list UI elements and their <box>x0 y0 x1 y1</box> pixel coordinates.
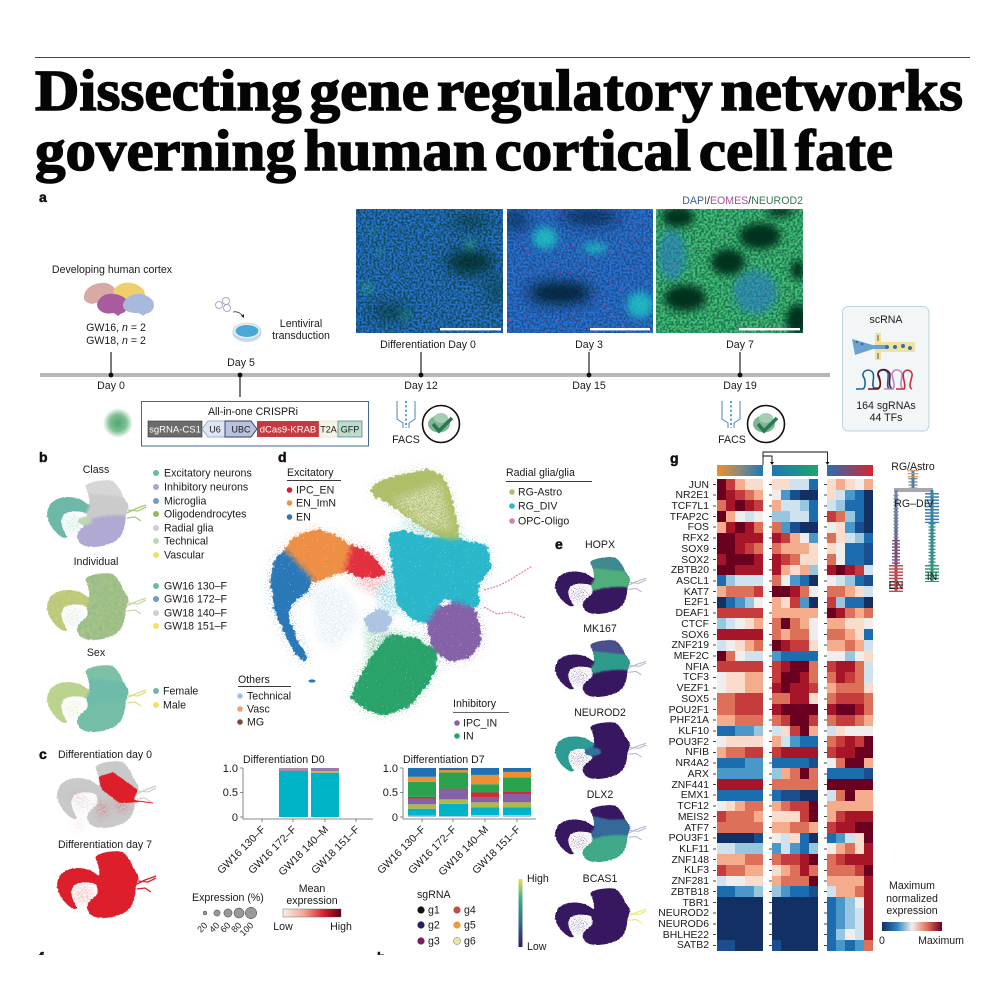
chart: differentiation D7 stacked bars: GW16 172–F <box>406 823 459 877</box>
legend: expression percent: 80 <box>229 920 243 934</box>
legend: class: Vascular <box>164 550 205 562</box>
chart: differentiation D7 stacked bars: 0.5 <box>383 787 398 799</box>
panel a: experimental timeline <box>39 189 929 446</box>
chart: differentiation D7 stacked bars: 1.0 <box>383 763 398 775</box>
legend: radial glia <box>506 467 592 528</box>
heatmap gene labels: PHF21A <box>670 715 709 726</box>
legend: others: Vasc <box>247 704 270 716</box>
legend: sex: Female <box>163 686 198 698</box>
legend: class: Radial glia <box>164 522 214 534</box>
timeline labels: Day 0 <box>97 380 125 392</box>
cropped panel letters f and h: f <box>39 949 44 965</box>
UMAP: MK167 <box>555 623 646 697</box>
scRNA panel <box>842 306 929 431</box>
chart: differentiation D7 stacked bars <box>375 754 536 878</box>
cortex samples: GW16, n = 2 <box>86 322 146 334</box>
legend: individual: GW18 140–F <box>164 608 228 620</box>
UMAP: differentiation day 7: Differentiation day 7 <box>58 839 152 851</box>
legend: sgRNA: g5 <box>464 920 476 932</box>
legend: maximum normalized expression: normalized <box>886 893 938 905</box>
panel b: class, individual and sex UMAPs <box>39 449 252 732</box>
trajectory branch arrows <box>763 452 830 465</box>
CRISPRi construct: GFP <box>341 424 359 434</box>
heatmap gene labels: ZNF441 <box>671 780 709 791</box>
legend: viridis colour bar <box>518 873 549 953</box>
micrograph stain legend: DAPI/EOMES/NEUROD2 <box>682 195 803 207</box>
legend: radial glia: RG_DIV <box>518 500 558 512</box>
legend: mean expression: expression <box>286 895 338 907</box>
legend: radial glia: OPC-Oligo <box>518 516 569 528</box>
chart: differentiation D0 stacked bars: GW18 151–F <box>309 823 362 877</box>
legend: expression percent: Expression (%) <box>192 892 264 904</box>
timeline labels: Day 3 <box>575 339 603 351</box>
legend: mean expression: High <box>330 921 352 933</box>
heatmap gene labels: POU3F1 <box>669 833 709 844</box>
lineage tree: RG–DIV <box>894 498 935 510</box>
legend: class <box>153 468 252 562</box>
legend: sgRNA <box>417 889 476 948</box>
cortex label: Developing human cortex <box>52 264 173 276</box>
heatmap gene labels: DEAF1 <box>676 608 709 619</box>
cropped panel letters f and h: h <box>377 949 386 965</box>
heatmap row ticks <box>713 479 716 951</box>
legend: maximum normalized expression: expression <box>886 905 938 917</box>
heatmap gene labels: POU2F1 <box>669 705 709 716</box>
heatmap gene labels: MEIS2 <box>678 812 709 823</box>
heatmap gene labels: VEZF1 <box>677 683 709 694</box>
legend: radial glia: RG-Astro <box>518 486 562 498</box>
heatmap gene labels: JUN <box>689 480 709 490</box>
UMAP: NEUROD2 <box>555 707 646 779</box>
heatmap gene labels: ZNF148 <box>671 855 709 866</box>
heatmap gene labels: KLF10 <box>678 726 709 737</box>
chart: differentiation D7 stacked bars: GW16 130–F <box>375 823 428 877</box>
heatmap gene labels: NEUROD2 <box>658 908 709 919</box>
scRNA panel: 164 sgRNAs <box>856 400 916 412</box>
legend: sgRNA: sgRNA <box>417 889 451 901</box>
legend: others: Others <box>238 674 270 686</box>
heatmap gene labels: NEUROD6 <box>658 919 709 930</box>
legend: maximum normalized expression: Maximum <box>918 935 964 947</box>
panel letter b: b <box>39 449 48 465</box>
UMAP: class <box>47 464 146 547</box>
FACS day 19 <box>718 401 784 446</box>
chart: differentiation D7 stacked bars: 0 <box>392 812 398 824</box>
lentiviral label: Lentiviral <box>280 318 322 330</box>
legend: others: Technical <box>247 690 291 702</box>
lentiviral label <box>272 318 330 342</box>
legend: expression percent: 20 <box>195 920 209 934</box>
scattered cells around clusters <box>310 520 465 670</box>
legend: class: Excitatory neurons <box>164 468 252 480</box>
heatmap gene labels: TBR1 <box>682 898 709 909</box>
timeline labels: Differentiation Day 0 <box>380 339 476 351</box>
lighter interior of RG-Astro cluster <box>393 482 452 530</box>
timeline labels <box>97 339 757 392</box>
bar GW16 130-F <box>408 768 436 817</box>
chart: differentiation D0 stacked bars: GW16 172–F <box>246 823 299 877</box>
legend: class: Inhibitory neurons <box>164 482 248 494</box>
heatmap gene labels: ASCL1 <box>676 576 709 587</box>
tree crossbar <box>894 488 933 492</box>
legend: class: Oligodendrocytes <box>164 508 246 520</box>
branch to EN <box>894 490 898 592</box>
legend: sgRNA: g1 <box>428 904 440 916</box>
legend: expression percent: 60 <box>218 920 232 934</box>
UMAP: HOPX: HOPX <box>585 539 615 551</box>
timeline stems and nodes <box>109 352 742 397</box>
panel letter g: g <box>670 450 679 466</box>
legend: individual <box>153 580 228 632</box>
CRISPRi construct <box>142 402 368 446</box>
heatmap gene labels: KLF3 <box>684 865 709 876</box>
panel c: differentiation day UMAPs <box>39 746 156 918</box>
icon: lentivirus and dish <box>216 298 262 342</box>
bar GW18 140-M <box>471 768 499 817</box>
micrograph: day 7 <box>656 207 810 336</box>
heatmap gene labels: SOX6 <box>681 630 709 641</box>
legend: others: MG <box>247 716 264 728</box>
legend: excitatory: EN_ImN <box>296 498 336 510</box>
panel letter e: e <box>555 536 563 552</box>
legend: mean expression: Low <box>273 921 293 933</box>
lineage tree <box>889 461 937 592</box>
scRNA panel: scRNA <box>870 314 903 326</box>
heatmap gene labels: RFX2 <box>682 533 709 544</box>
heatmap gene labels: TFAP2C <box>670 512 709 523</box>
chart: differentiation D0 stacked bars: Differentiation D0 <box>243 754 325 766</box>
FACS day 12: FACS <box>392 434 420 446</box>
heatmap row ticks, column 2 <box>769 479 772 951</box>
top rule <box>35 57 970 58</box>
heatmap gene labels: NFIA <box>685 662 709 673</box>
timeline labels: Day 5 <box>227 357 255 369</box>
legend: sgRNA: g3 <box>428 936 440 948</box>
heatmap gene labels: NR4A2 <box>676 758 709 769</box>
legend: maximum normalized expression: 0 <box>879 935 885 947</box>
chart: differentiation D7 stacked bars: Differentiation D7 <box>403 754 485 766</box>
UMAP: DLX2: DLX2 <box>587 789 613 801</box>
CRISPRi construct: T2A <box>320 424 337 434</box>
legend: inhibitory: IN <box>463 730 474 742</box>
heatmap gene labels: SOX9 <box>681 544 709 555</box>
lineage tree: EN <box>889 580 903 592</box>
UMAP: individual <box>47 556 146 640</box>
chart: differentiation D0 stacked bars: 0.5 <box>223 787 238 799</box>
FACS day 12 <box>392 401 460 446</box>
panel letter c: c <box>39 746 47 762</box>
OPC-Oligo streaks <box>484 566 532 618</box>
UMAP: BCAS1: BCAS1 <box>583 873 617 885</box>
heatmap trajectory gradient bars <box>717 465 873 476</box>
lineage tree: IN <box>927 571 937 583</box>
CRISPRi construct: UBC <box>231 424 251 434</box>
legend: mean expression <box>273 883 352 933</box>
UMAP: individual: Individual <box>74 556 118 568</box>
heatmap gene labels: ARX <box>688 769 709 780</box>
legend: inhibitory: Inhibitory <box>453 698 497 710</box>
heatmap gene labels: CTCF <box>681 619 709 630</box>
bar GW16 172-F <box>439 768 468 817</box>
small technical cluster <box>308 679 316 683</box>
heatmap gene labels <box>658 480 709 951</box>
chart: differentiation D0 stacked bars: GW16 130–F <box>215 823 268 877</box>
UMAP: BCAS1 <box>555 873 646 945</box>
heatmap gene labels: POU3F2 <box>669 737 709 748</box>
heatmap gene labels: ZBTB18 <box>671 887 709 898</box>
CRISPRi construct: All-in-one CRISPRi <box>208 406 298 418</box>
legend: individual: GW16 130–F <box>164 580 228 592</box>
heatmap gene labels: ZBTB20 <box>671 565 709 576</box>
legend: viridis colour bar: High <box>527 873 549 885</box>
UMAP: NEUROD2: NEUROD2 <box>574 707 626 719</box>
legend: radial glia: Radial glia/glia <box>506 467 575 479</box>
UMAP: sex: Sex <box>87 647 106 659</box>
heatmap gene labels: E2F1 <box>684 597 709 608</box>
legend: viridis colour bar: Low <box>527 941 547 953</box>
timeline labels: Day 12 <box>404 380 438 392</box>
legend: inhibitory <box>453 698 509 742</box>
chart: differentiation D7 stacked bars: GW18 151–F <box>470 823 523 877</box>
legend: sgRNA: g4 <box>464 904 476 916</box>
heatmap gene labels: SATB2 <box>677 940 709 951</box>
heatmap gene labels: KAT7 <box>684 587 709 598</box>
heatmap gene labels: TCF12 <box>677 801 709 812</box>
CRISPRi construct: sgRNA-CS1 <box>149 424 201 436</box>
legend: others <box>237 674 291 728</box>
heatmap row ticks, column 3 <box>824 479 827 951</box>
UMAP: differentiation day 7 <box>57 839 156 918</box>
legend: excitatory: IPC_EN <box>296 484 334 496</box>
tree labels: RG/Astro <box>891 461 935 473</box>
title: Dissecting gene regulatory networks <box>35 58 963 123</box>
legend: sgRNA: g6 <box>464 936 476 948</box>
heatmap gene labels: SOX5 <box>681 694 709 705</box>
legend: individual: GW18 151–F <box>164 620 228 632</box>
legend: expression percent: 40 <box>207 920 221 934</box>
legend: sgRNA: g2 <box>428 920 440 932</box>
UMAP: differentiation day 0 <box>57 749 156 829</box>
panel letter a: a <box>39 189 47 205</box>
micrograph: day 0 <box>356 209 505 333</box>
UMAP: MK167: MK167 <box>583 623 617 635</box>
UMAP: cell types <box>270 469 492 716</box>
legend: maximum normalized expression: Maximum <box>889 880 935 892</box>
legend: expression percent <box>192 892 264 938</box>
heatmap gene labels: BHLHE22 <box>663 930 709 941</box>
heatmap gene labels: TCF7L1 <box>671 501 709 512</box>
heatmap gene labels: FOS <box>688 522 709 533</box>
branch to IN <box>930 490 934 582</box>
panel letter d: d <box>278 449 287 465</box>
heatmap gene labels: EMX1 <box>681 790 709 801</box>
legend: expression percent: 100 <box>238 920 255 938</box>
legend: sex: Male <box>163 700 186 712</box>
legend: class: Technical <box>164 536 208 548</box>
scRNA panel: 44 TFs <box>870 412 902 424</box>
micrograph: day 3 <box>501 209 653 333</box>
root branch <box>912 470 914 490</box>
chart: differentiation D7 stacked bars: GW18 140–M <box>436 824 491 878</box>
legend: class: Microglia <box>164 496 206 508</box>
UMAP: differentiation day 0: Differentiation day 0 <box>58 749 152 761</box>
UMAP: DLX2 <box>555 789 646 862</box>
FACS day 19: FACS <box>718 434 746 446</box>
heatmap gene labels: SOX2 <box>681 555 709 566</box>
legend: maximum normalized expression <box>879 880 964 947</box>
timeline labels: Day 7 <box>726 339 754 351</box>
legend: excitatory: EN <box>296 512 311 524</box>
title: governing human cortical cell fate <box>35 118 893 183</box>
chart: differentiation D0 stacked bars <box>215 754 373 878</box>
chart: differentiation D0 stacked bars: GW18 140–M <box>276 824 331 878</box>
lentiviral label: transduction <box>272 330 330 342</box>
cortex samples <box>86 322 146 347</box>
CRISPRi construct: U6 <box>209 424 221 434</box>
cortex samples: GW18, n = 2 <box>86 335 146 347</box>
chart: differentiation D0 stacked bars: 0 <box>232 812 238 824</box>
legend: mean expression: Mean <box>299 883 325 895</box>
timeline bar <box>40 373 830 377</box>
legend: sex <box>153 686 198 712</box>
UMAP: class: Class <box>83 464 109 476</box>
timeline labels: Day 15 <box>572 380 606 392</box>
legend: excitatory: Excitatory <box>287 467 334 479</box>
UMAP: HOPX <box>555 539 646 614</box>
heatmap gene labels: TCF3 <box>683 672 709 683</box>
heatmap gene labels: KLF11 <box>679 844 709 855</box>
chart: differentiation D0 stacked bars: 1.0 <box>223 763 238 775</box>
legend: excitatory <box>287 467 341 524</box>
bar GW18 151-F <box>503 768 531 817</box>
cropped panel letters f and h <box>30 949 390 967</box>
UMAP: sex <box>47 647 146 732</box>
heatmap: column 2 <box>772 479 818 951</box>
heatmap gene labels: ATF7 <box>684 822 709 834</box>
legend: individual: GW16 172–F <box>164 594 228 606</box>
heatmap gene labels: NR2E1 <box>676 490 709 501</box>
heatmap gene labels: MEF2C <box>674 651 709 662</box>
icon: green cell blob <box>103 408 133 438</box>
legend: inhibitory: IPC_IN <box>463 718 497 730</box>
panel e: marker gene UMAPs <box>555 536 646 945</box>
CRISPRi construct: dCas9-KRAB <box>260 424 316 436</box>
heatmap: column 3 <box>827 479 873 951</box>
heatmap: column 1 <box>717 479 763 951</box>
heatmap gene labels: ZNF219 <box>671 640 709 651</box>
icon: brains <box>84 283 154 316</box>
heatmap gene labels: NFIB <box>685 747 709 758</box>
title <box>35 58 963 183</box>
panel d: main UMAP <box>237 449 592 742</box>
timeline labels: Day 19 <box>723 380 757 392</box>
heatmap gene labels: ZNF281 <box>671 876 709 887</box>
